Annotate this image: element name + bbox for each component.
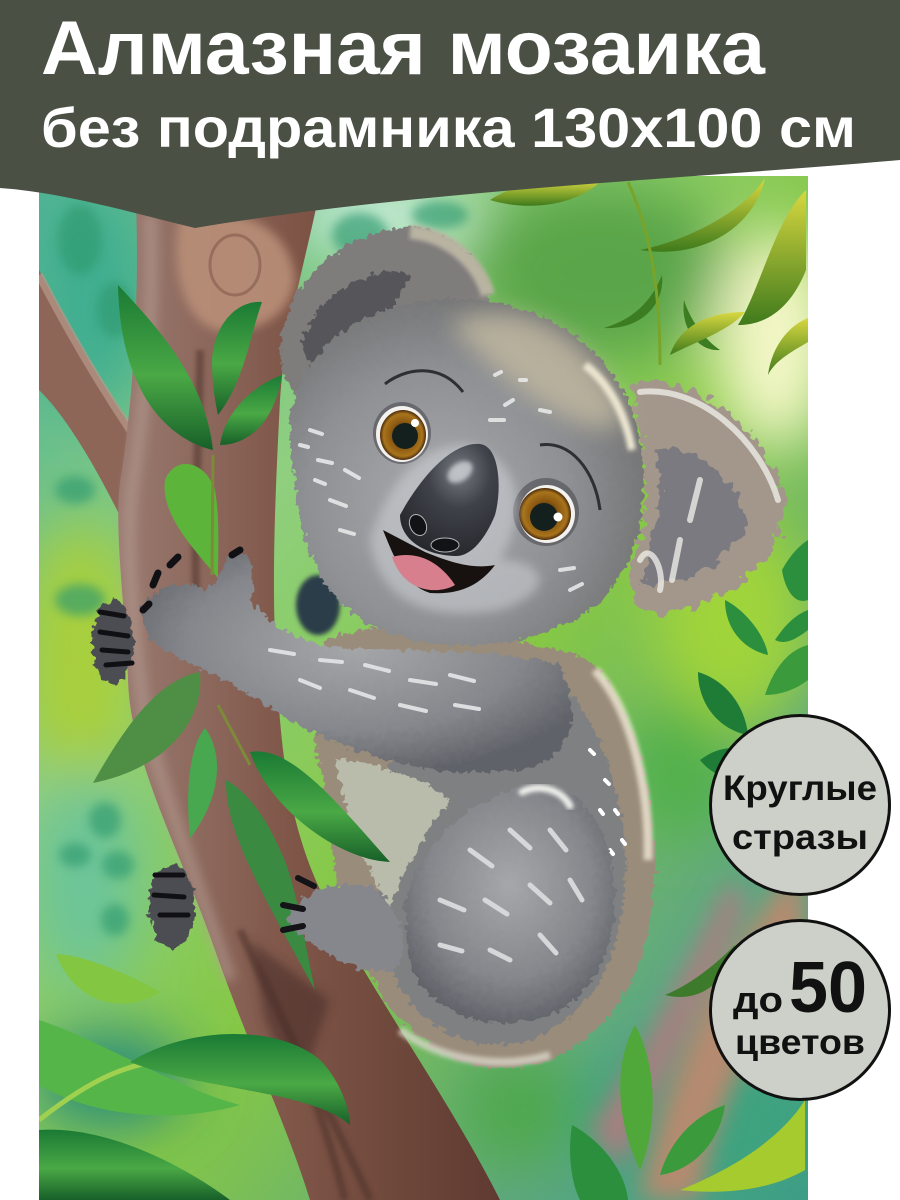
far paws behind trunk: [92, 600, 195, 949]
koala right ear: [630, 382, 785, 613]
koala nose: [400, 444, 499, 556]
koala left eye: [373, 402, 431, 464]
koala head: [290, 299, 644, 645]
koala right eye: [513, 478, 579, 546]
koala haunch: [405, 785, 615, 1023]
koala eyebrows: [385, 371, 600, 510]
koala shoulder shadow: [296, 575, 340, 635]
title: Алмазная мозаика: [41, 6, 766, 91]
koala white fur specks: [300, 372, 582, 590]
forest background: [20, 176, 835, 1200]
koala muzzle highlight: [370, 445, 540, 613]
tree trunk and branch: [39, 176, 500, 1200]
badge: round rhinestones: [710, 716, 890, 894]
badge: up to 50 colours: [710, 920, 890, 1100]
subtitle: без подрамника 130х100 см: [41, 96, 856, 159]
koala lower foot: [283, 878, 403, 971]
background leaves: [39, 178, 808, 1200]
illustration: koala on a tree: [20, 176, 835, 1200]
koala arm: [140, 552, 572, 772]
koala mouth: [383, 530, 495, 593]
badge: up to 50 colours: 50: [789, 948, 867, 1028]
koala left ear: [280, 228, 490, 410]
koala: [140, 228, 785, 1068]
header banner: [0, 0, 900, 228]
badge: up to 50 colours: до: [733, 979, 783, 1020]
badge: round rhinestones: Круглые: [723, 769, 877, 808]
badge: round rhinestones: стразы: [732, 818, 868, 857]
koala body: [313, 627, 655, 1068]
foreground eucalyptus leaves: [93, 285, 390, 990]
badge: up to 50 colours: цветов: [735, 1023, 865, 1062]
